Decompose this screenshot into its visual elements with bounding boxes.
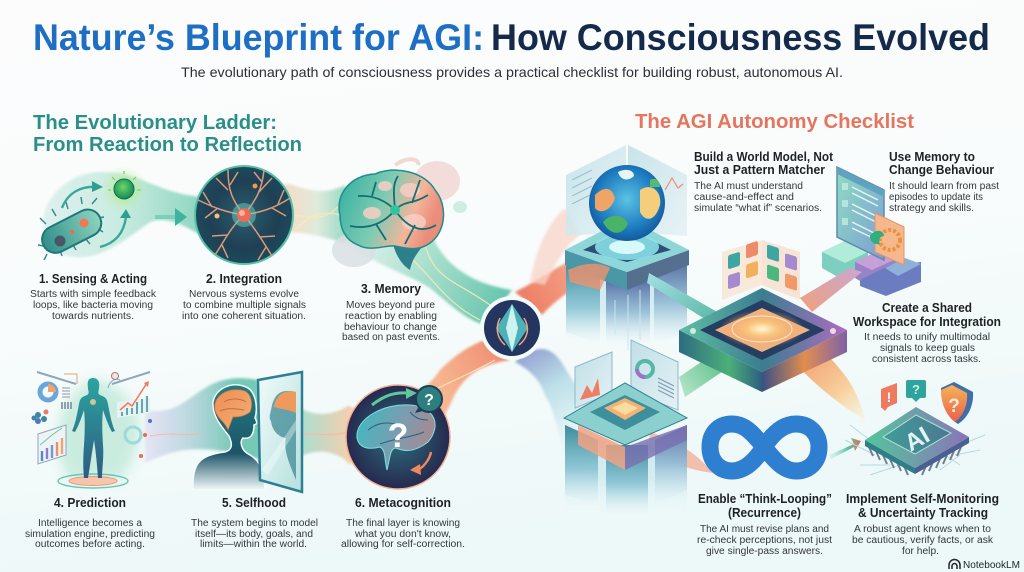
- section heading: checklist: The AGI Autonomy Checklist: [635, 110, 914, 133]
- step 3 text: 3. Memory: [361, 282, 421, 296]
- checklist item: world model: [694, 150, 834, 214]
- step 2 text: [182, 272, 306, 322]
- icon: nervous system disc: [194, 165, 294, 265]
- icon: AI chip with alerts: [845, 380, 985, 475]
- step 1 text: loops, like bacteria moving: [33, 300, 153, 311]
- step 3 text: reaction by enabling: [345, 311, 437, 322]
- checklist item: think-looping: (Recurrence): [728, 506, 801, 520]
- step 5 text: The system begins to model: [191, 518, 318, 529]
- icon: metacognition brain: ?: [424, 392, 434, 409]
- section heading: evolutionary ladder: From Reaction to Reflection: [33, 133, 302, 156]
- subtitle: The evolutionary path of consciousness provides a practical checklist for building robust, autonomous AI.: [181, 64, 843, 80]
- step 1 text: Starts with simple feedback: [30, 289, 157, 300]
- checklist item: world model: Build a World Model, Not: [694, 150, 834, 164]
- checklist item: memory: strategy and skills.: [889, 203, 974, 214]
- step 5 text: 5. Selfhood: [222, 496, 286, 510]
- step 1 text: [30, 272, 157, 322]
- step 6 text: [341, 496, 465, 550]
- title: [33, 17, 990, 58]
- step 1 text: 1. Sensing & Acting: [39, 272, 147, 286]
- icon: AI chip with alerts: ?: [912, 382, 920, 397]
- step 4 text: [25, 496, 155, 550]
- icon: AI chip with alerts: AI: [900, 422, 934, 457]
- title: How Consciousness Evolved: [491, 17, 990, 58]
- icon: world model tower with globe: [565, 145, 689, 350]
- section heading: evolutionary ladder: The Evolutionary Ladder:: [33, 111, 277, 134]
- panel: flowing ribbons: [43, 172, 612, 470]
- step 2 text: Nervous systems evolve: [189, 289, 299, 300]
- step 5 text: [191, 496, 318, 550]
- checklist item: world model: simulate “what if” scenarios.: [694, 203, 822, 214]
- icon: infinity loop: [710, 424, 819, 471]
- checklist item: world model: Just a Pattern Matcher: [694, 163, 825, 177]
- icon: metacognition brain: [346, 385, 450, 489]
- checklist item: self-monitoring: A robust agent knows when to: [854, 524, 991, 535]
- icon: AI chip with alerts: ?: [948, 396, 960, 417]
- icon: AI chip with alerts: !: [887, 389, 891, 405]
- icon: recurrence tower: [564, 340, 687, 515]
- step 4 text: simulation engine, predicting: [25, 529, 155, 540]
- checklist item: self-monitoring: Implement Self-Monitoring: [846, 492, 999, 506]
- step 4 text: outcomes before acting.: [35, 539, 145, 550]
- arrow: loop to chip: [829, 438, 861, 459]
- step 4 text: Intelligence becomes a: [38, 518, 142, 529]
- checklist item: workspace: consistent across tasks.: [872, 354, 981, 365]
- checklist item: self-monitoring: for help.: [902, 546, 939, 557]
- checklist item: think-looping: [697, 492, 832, 557]
- icon: metacognition brain: ?: [388, 417, 408, 455]
- icon: memory brain: [332, 159, 467, 270]
- step 5 text: limits—within the world.: [200, 539, 307, 550]
- checklist item: workspace: [853, 301, 1001, 365]
- checklist item: workspace: Workspace for Integration: [853, 315, 1001, 329]
- step 6 text: The final layer is knowing: [346, 518, 460, 529]
- checklist item: memory: episodes to update its: [889, 192, 983, 203]
- checklist item: self-monitoring: & Uncertainty Tracking: [858, 506, 988, 520]
- step 5 text: itself—its body, goals, and: [195, 529, 313, 540]
- checklist item: self-monitoring: [846, 492, 999, 557]
- icon: central crystal node: [480, 296, 544, 360]
- step 3 text: Moves beyond pure: [346, 300, 435, 311]
- watermark: NotebookLM: NotebookLM: [963, 559, 1020, 571]
- step 6 text: allowing for self-correction.: [341, 539, 465, 550]
- checklist item: self-monitoring: be cautious, verify facts, or ask: [852, 535, 994, 546]
- icon: beams between modules: [647, 268, 865, 473]
- checklist item: memory: Use Memory to: [889, 150, 975, 164]
- step 2 text: to combine multiple signals: [183, 300, 306, 311]
- checklist item: world model: The AI must understand: [694, 181, 803, 192]
- title: Nature’s Blueprint for AGI:: [33, 17, 484, 58]
- checklist item: workspace: It needs to unify multimodal: [864, 332, 990, 343]
- step 3 text: behaviour to change: [344, 322, 437, 333]
- step 2 text: 2. Integration: [206, 272, 282, 286]
- icon: memory screen with gear: [822, 167, 921, 296]
- icon: prediction human figure: [32, 372, 152, 488]
- step 6 text: what you don't know,: [354, 529, 451, 540]
- icon: selfhood head and mirror: [193, 372, 302, 492]
- checklist item: think-looping: Enable “Think-Looping”: [698, 492, 832, 506]
- step 3 text: [342, 282, 440, 343]
- checklist item: memory: [889, 150, 999, 214]
- checklist item: workspace: signals to keep guals: [880, 343, 975, 354]
- step 2 text: into one coherent situation.: [182, 311, 306, 322]
- checklist item: think-looping: The AI must revise plans and: [700, 524, 829, 535]
- checklist item: memory: Change Behaviour: [889, 163, 994, 177]
- checklist item: think-looping: re-check perceptions, not just: [697, 535, 832, 546]
- step 1 text: towards nutrients.: [52, 311, 134, 322]
- checklist item: think-looping: give single-pass answers.: [706, 546, 823, 557]
- checklist item: world model: cause-and-effect and: [694, 192, 794, 203]
- section heading: evolutionary ladder: [33, 111, 302, 156]
- icon: shared workspace platform: [679, 240, 847, 392]
- checklist item: workspace: Create a Shared: [882, 301, 972, 315]
- step 3 text: based on past events.: [342, 332, 440, 343]
- step 6 text: 6. Metacognition: [355, 496, 451, 510]
- checklist item: memory: It should learn from past: [889, 181, 999, 192]
- step 4 text: 4. Prediction: [54, 496, 126, 510]
- icon: bacterium moving towards nutrient: [37, 165, 187, 260]
